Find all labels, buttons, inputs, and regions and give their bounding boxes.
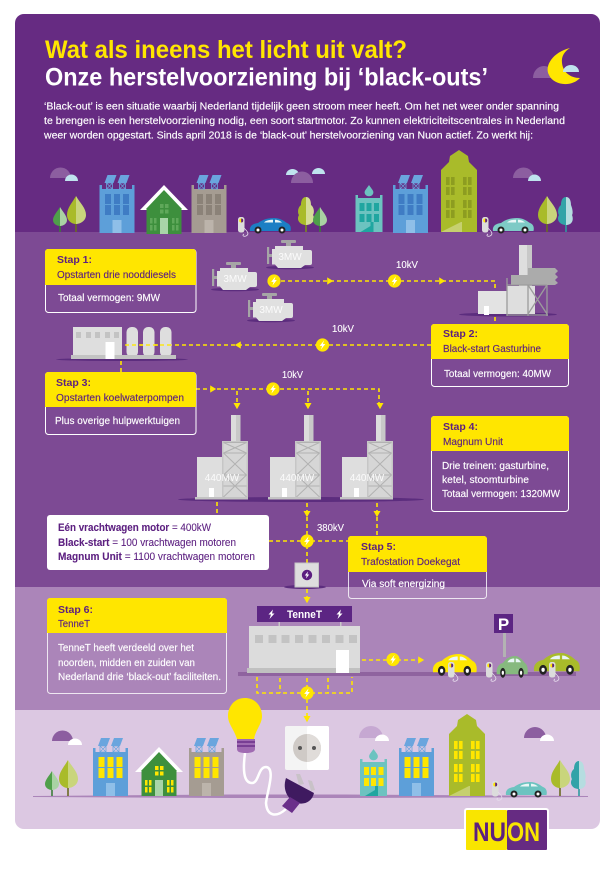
- wiring: TenneT to grid and socket: [257, 677, 352, 722]
- callout: truck engine comparison: Black-start = 100 vrachtwagen motoren: [58, 537, 236, 549]
- wiring: step 2 to step 3: [121, 323, 431, 372]
- panel: stap 2: Black-start Gasturbine: [443, 343, 541, 355]
- yellow car: [433, 654, 477, 681]
- skyline top: [50, 150, 573, 236]
- callout: truck engine comparison: Eén vrachtwagen motor = 400kW: [58, 522, 212, 534]
- panel: stap 3: Opstarten koelwaterpompen: [56, 392, 184, 404]
- panel: stap 1: Totaal vermogen: 9MW: [58, 292, 160, 304]
- icon: black-start gas turbine: [459, 245, 558, 316]
- icon: cooling water pump station: [56, 327, 188, 361]
- callout: truck engine comparison: Magnum Unit = 1100 vrachtwagen motoren: [58, 551, 255, 563]
- icon: wall socket: [285, 726, 329, 770]
- skyline bottom: [45, 714, 586, 800]
- electric cars at charging: [433, 653, 580, 681]
- logo: NUON: ON: [507, 817, 540, 847]
- panel: stap 3: Plus overige hulpwerktuigen: [55, 415, 180, 427]
- panel: stap 1: Opstarten drie nooddiesels: [57, 269, 176, 281]
- icon: moon with clouds: [533, 48, 580, 84]
- panel: stap 4: Totaal vermogen: 1320MW: [442, 488, 560, 500]
- panel: stap 4: Magnum Unit: [443, 436, 503, 448]
- panel: stap 1: [45, 249, 196, 312]
- trees left: [53, 196, 86, 232]
- panel: stap 2: [431, 324, 569, 386]
- panel: stap 6: Stap 6:: [58, 604, 93, 616]
- teal building lit: [360, 749, 387, 796]
- unit 3: [340, 415, 393, 500]
- olive building lit: [449, 714, 485, 796]
- clouds bottom: [52, 726, 554, 745]
- wiring: step 3 to units: 10kV: [282, 369, 303, 381]
- diesel engine 2: 3MW: [278, 252, 302, 263]
- olive car: [534, 653, 580, 681]
- icon: transformer box: [284, 563, 326, 603]
- logo: NUON: NU: [473, 817, 506, 847]
- olive building: [441, 150, 477, 232]
- diesel engine 1: 3MW: [223, 274, 247, 285]
- unit 2: 440MW: [280, 473, 315, 484]
- blue building lit: [93, 738, 128, 796]
- grey building lit: [189, 738, 224, 796]
- wiring: step 1 to step 2: [267, 259, 495, 324]
- title: [45, 36, 488, 92]
- panel: stap 5: Stap 5:: [361, 541, 396, 553]
- panel: stap 6: TenneT: [58, 618, 91, 630]
- trees left bottom: [45, 760, 78, 796]
- title: Wat als ineens het licht uit valt?: [45, 36, 407, 64]
- panel: stap 4: Stap 4:: [443, 421, 478, 433]
- skyline bottom ground: [33, 794, 588, 798]
- icons: three diesel engines: [211, 240, 314, 322]
- wiring: step 2 to step 3: 10kV: [332, 323, 354, 335]
- unit 3: 440MW: [350, 473, 385, 484]
- icon: Magnum Unit power trains: [178, 415, 424, 502]
- panel: stap 5: [348, 536, 487, 598]
- intro text: weer worden opgestart. Sinds april 2018 is de ‘black-out’ herstelvoorziening van Nuon actief. Zo werkt hij:: [43, 130, 533, 142]
- panel: stap 5: Trafostation Doekegat: [361, 556, 460, 568]
- panel: stap 3: [45, 372, 196, 434]
- unit 1: [195, 415, 248, 500]
- callout: truck engine comparison: [47, 515, 269, 570]
- panel: stap 4: ketel, stoomturbine: [442, 474, 529, 486]
- panel: stap 3: Stap 3:: [56, 377, 91, 389]
- intro text: ‘Black-out’ is een situatie waarbij Nederland tijdelijk geen stroom meer heeft. Om het net weer onder spanning: [44, 100, 559, 112]
- wiring: step 1 to step 2: 10kV: [396, 259, 418, 271]
- diesel engine 3: 3MW: [259, 305, 283, 316]
- icon: plug: [282, 774, 315, 813]
- icon: TenneT building: TenneT: [287, 609, 322, 621]
- blue building lit right: [399, 738, 434, 796]
- wiring: units to substation: [217, 502, 380, 563]
- blue building: [100, 175, 134, 233]
- panel: stap 6: TenneT heeft verdeeld over het: [58, 642, 194, 654]
- trees centre: [298, 197, 327, 232]
- panel: stap 6: [47, 598, 227, 694]
- blue building right: [393, 175, 428, 233]
- panel: stap 5: Via soft energizing: [362, 578, 445, 590]
- electric car blue: [238, 217, 291, 236]
- panel: stap 6: Nederland drie ‘black-out’ faciliteiten.: [58, 671, 221, 683]
- wiring: step 3 to units: [196, 369, 384, 409]
- road stap 6: [238, 672, 576, 676]
- panel: stap 2: Stap 2:: [443, 328, 478, 340]
- wiring: TenneT to cars: [362, 653, 424, 666]
- intro text: te brengen is een herstelvoorziening nodig, een soort startmotor. Zo kunnen elektriciteitscentrales in Nederland: [44, 115, 565, 127]
- panel: stap 4: Drie treinen: gasturbine,: [442, 460, 549, 472]
- wiring: units to substation: 380kV: [317, 522, 344, 534]
- icon: parking sign: P: [498, 615, 509, 634]
- electric car bottom: [492, 781, 547, 800]
- logo: NUON: [464, 808, 549, 852]
- panel: stap 1: Stap 1:: [57, 254, 92, 266]
- teal building: [356, 185, 382, 232]
- unit 1: 440MW: [205, 473, 240, 484]
- green car: [486, 656, 528, 681]
- electric car teal: [482, 217, 534, 236]
- panel: stap 6: noorden, midden en zuiden van: [58, 657, 195, 669]
- green house: [140, 185, 188, 234]
- panel: stap 4: [431, 416, 569, 512]
- intro text: [43, 100, 565, 142]
- trees right: [538, 196, 573, 232]
- clouds top: [50, 168, 541, 183]
- unit 2: [268, 415, 321, 500]
- icon: TenneT building: [247, 606, 360, 673]
- title: Onze herstelvoorziening bij ‘black-outs’: [45, 64, 488, 92]
- panel: stap 2: Totaal vermogen: 40MW: [444, 368, 551, 380]
- green house lit: [135, 747, 183, 796]
- icon: parking sign: [494, 614, 513, 657]
- grey building: [192, 175, 226, 233]
- icon: light bulb with cable: [228, 698, 286, 815]
- trees right bottom: [551, 760, 586, 796]
